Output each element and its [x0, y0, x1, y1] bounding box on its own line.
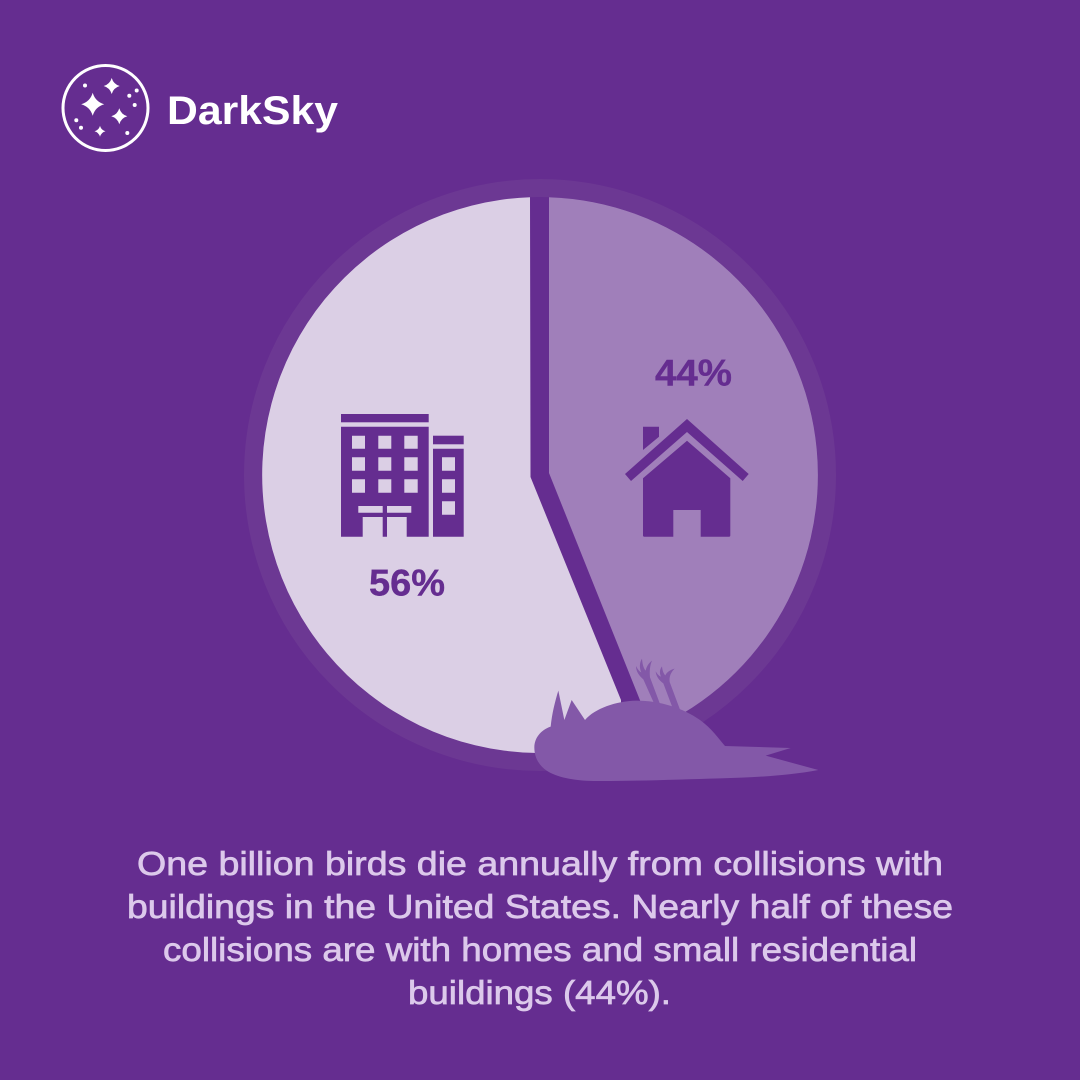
bird leg left — [636, 659, 660, 704]
icon: apartment building — [341, 414, 464, 537]
caption text — [127, 846, 953, 1012]
logo: DarkSky — [63, 66, 339, 150]
caption text: buildings in the United States. Nearly half of these — [127, 889, 953, 926]
caption text: buildings (44%). — [408, 975, 671, 1012]
caption text: collisions are with homes and small residential — [163, 932, 917, 969]
bird leg right — [656, 666, 681, 711]
bird body — [534, 691, 818, 781]
caption text: One billion birds die annually from collisions with — [137, 846, 943, 883]
label: 44%: 44% — [655, 352, 732, 394]
illustration: dead bird silhouette — [534, 659, 818, 781]
pie chart: building collisions — [253, 188, 827, 762]
label: 56%: 56% — [369, 562, 445, 604]
chart outer ring — [253, 188, 827, 762]
pie slice: 56% large buildings — [262, 197, 621, 753]
icon: starry circle — [63, 66, 148, 150]
logo wordmark: DarkSky — [167, 89, 339, 133]
icon: house — [625, 419, 749, 537]
pie slice: 44% homes — [549, 197, 818, 720]
